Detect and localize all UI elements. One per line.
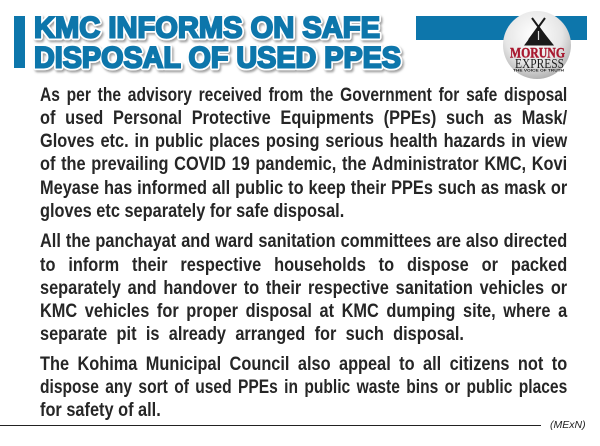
accent bar: right (416, 16, 587, 40)
title: DISPOSAL OF USED PPES (34, 42, 401, 74)
text: to inform their respective households to dispose or packed (40, 255, 567, 276)
paragraph 2 (40, 231, 568, 345)
title: DISPOSAL OF USED PPES (34, 42, 401, 74)
credit: (MExN) (550, 419, 586, 431)
title: KMC INFORMS ON SAFE (34, 12, 380, 44)
text: All the panchayat and ward sanitation committees are also directed (40, 231, 567, 252)
text: The Kohima Municipal Council also appeal to all citizens not to (40, 354, 567, 375)
text: for safety of all. (40, 400, 161, 421)
paragraph 1 (40, 85, 568, 222)
logo wordmark: EXPRESS: EXPRESS (515, 56, 564, 71)
text: As per the advisory received from the Government for safe disposal (40, 85, 567, 106)
text: gloves etc separately for safe disposal. (40, 201, 344, 222)
header graphic (14, 11, 587, 79)
logo: Morung Express (503, 11, 571, 79)
text: Meyase has informed all public to keep their PPEs such as mask or (40, 178, 567, 199)
text: dispose any sort of used PPEs in public waste bins or public places (40, 377, 567, 398)
footer rule (0, 425, 541, 426)
text: of used Personal Protective Equipments (PPEs) such as Mask/ (40, 108, 567, 129)
text: separate pit is already arranged for such disposal. (40, 324, 464, 345)
title: KMC INFORMS ON SAFE (34, 12, 380, 44)
accent bar: left (14, 16, 25, 68)
title (34, 12, 401, 74)
text: of the prevailing COVID 19 pandemic, the Administrator KMC, Kovi (40, 154, 567, 175)
text: KMC vehicles for proper disposal at KMC dumping site, where a (40, 301, 567, 322)
logo wordmark: MORUNG: MORUNG (510, 46, 565, 62)
paragraph 3 (40, 354, 567, 421)
logo tagline: THE VOICE OF TRUTH (513, 68, 565, 72)
icon: morung rafters (525, 18, 553, 45)
text: separately and handover to their respective sanitation vehicles or (40, 278, 567, 299)
text: Gloves etc. in public places posing serious health hazards in view (40, 131, 567, 152)
